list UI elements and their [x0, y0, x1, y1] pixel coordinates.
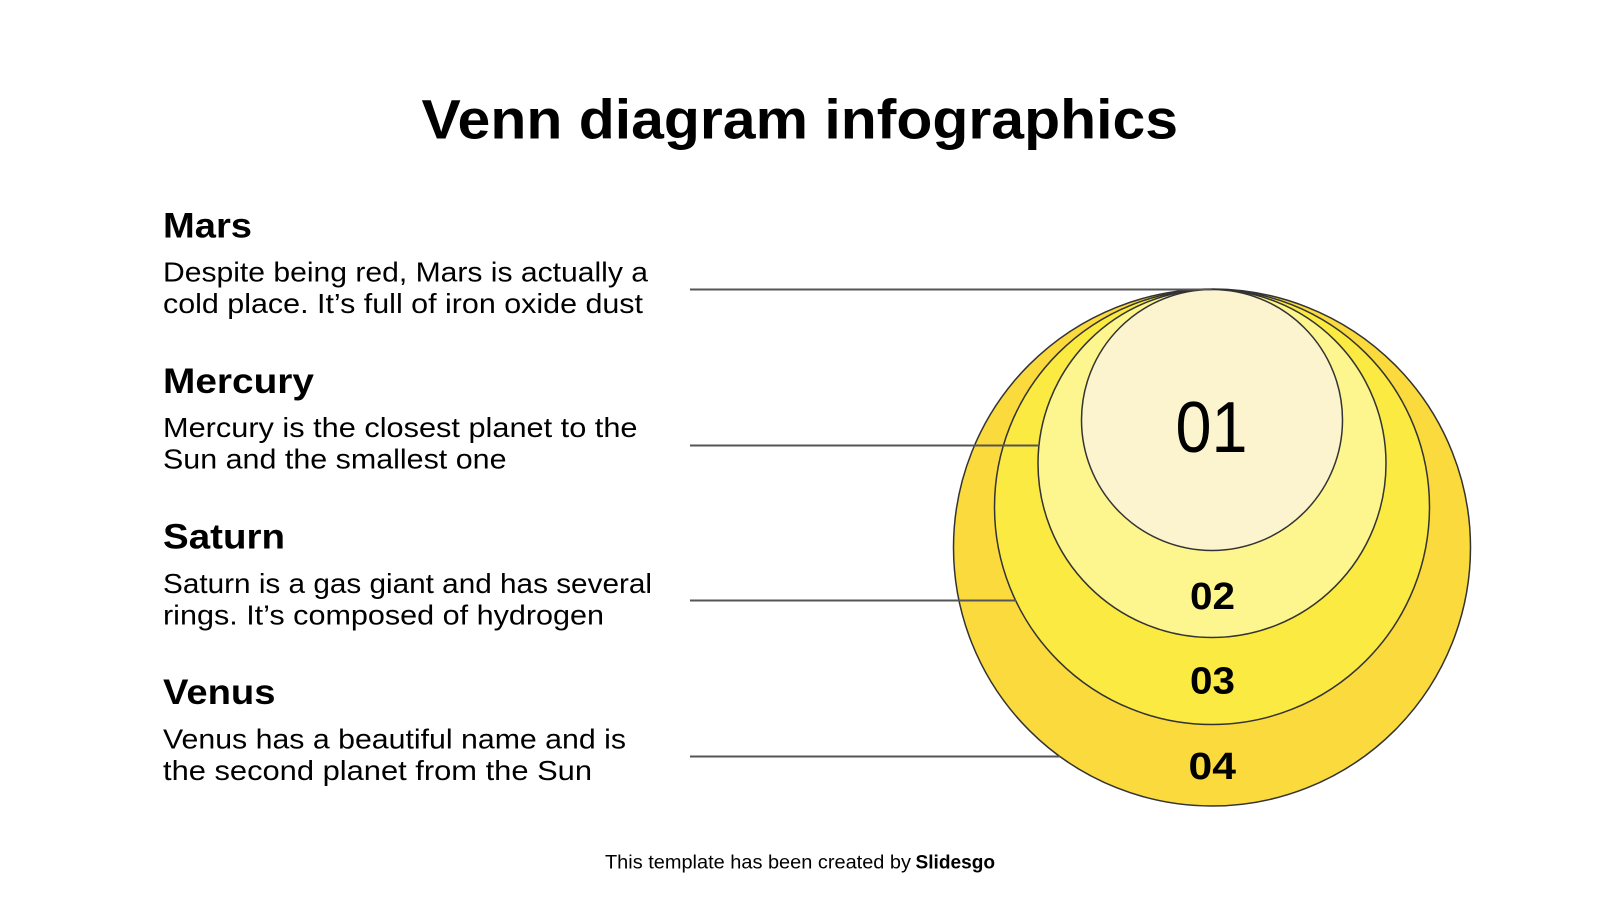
circle 04 [954, 289, 1470, 806]
panel: Saturn text [163, 518, 652, 630]
text block: Mars description: cold place. It’s full of iron oxide dust [163, 288, 643, 319]
number 02: 02 [1190, 576, 1235, 618]
number 03: 03 [1190, 660, 1235, 702]
text block: Saturn description: Saturn is a gas giant and has several [163, 568, 652, 599]
venn diagram [690, 289, 1470, 806]
panel: Mercury text [163, 362, 638, 474]
text block: Saturn description: rings. It’s composed of hydrogen [163, 600, 604, 630]
text block: Mars description [163, 256, 648, 319]
text block: Saturn description [163, 568, 652, 630]
text block: Venus description: the second planet from the Sun [163, 755, 592, 786]
connector line: Saturn [690, 600, 1016, 602]
heading: Saturn: Saturn [163, 518, 285, 556]
text block: Mercury description [163, 412, 638, 474]
circle 03 [994, 290, 1430, 724]
heading: Mercury: Mercury [163, 362, 315, 401]
connector line: Mercury [690, 444, 1039, 446]
title: Venn diagram infographics [422, 88, 1178, 150]
number 01: 01 [1176, 388, 1248, 468]
panel: Venus text [163, 673, 626, 786]
panel: Mars text [163, 206, 648, 319]
connector line: Mars [690, 288, 1212, 290]
text block: Venus description [163, 724, 626, 786]
footer credit: Slidesgo [916, 852, 995, 874]
text block: Mercury description: Sun and the smallest one [163, 444, 506, 474]
heading: Mars: Mars [163, 206, 252, 246]
connector line: Venus [690, 756, 1060, 758]
text block: Mars description: Despite being red, Mars is actually a [163, 256, 648, 288]
circle 01 [1082, 290, 1342, 550]
text block: Mercury description: Mercury is the closest planet to the [163, 412, 638, 443]
footer credit: This template has been created by [605, 852, 912, 874]
number 04: 04 [1188, 746, 1236, 788]
text block: Venus description: Venus has a beautiful name and is [163, 724, 626, 754]
circle 02 [1038, 290, 1386, 638]
heading: Venus: Venus [163, 673, 276, 712]
